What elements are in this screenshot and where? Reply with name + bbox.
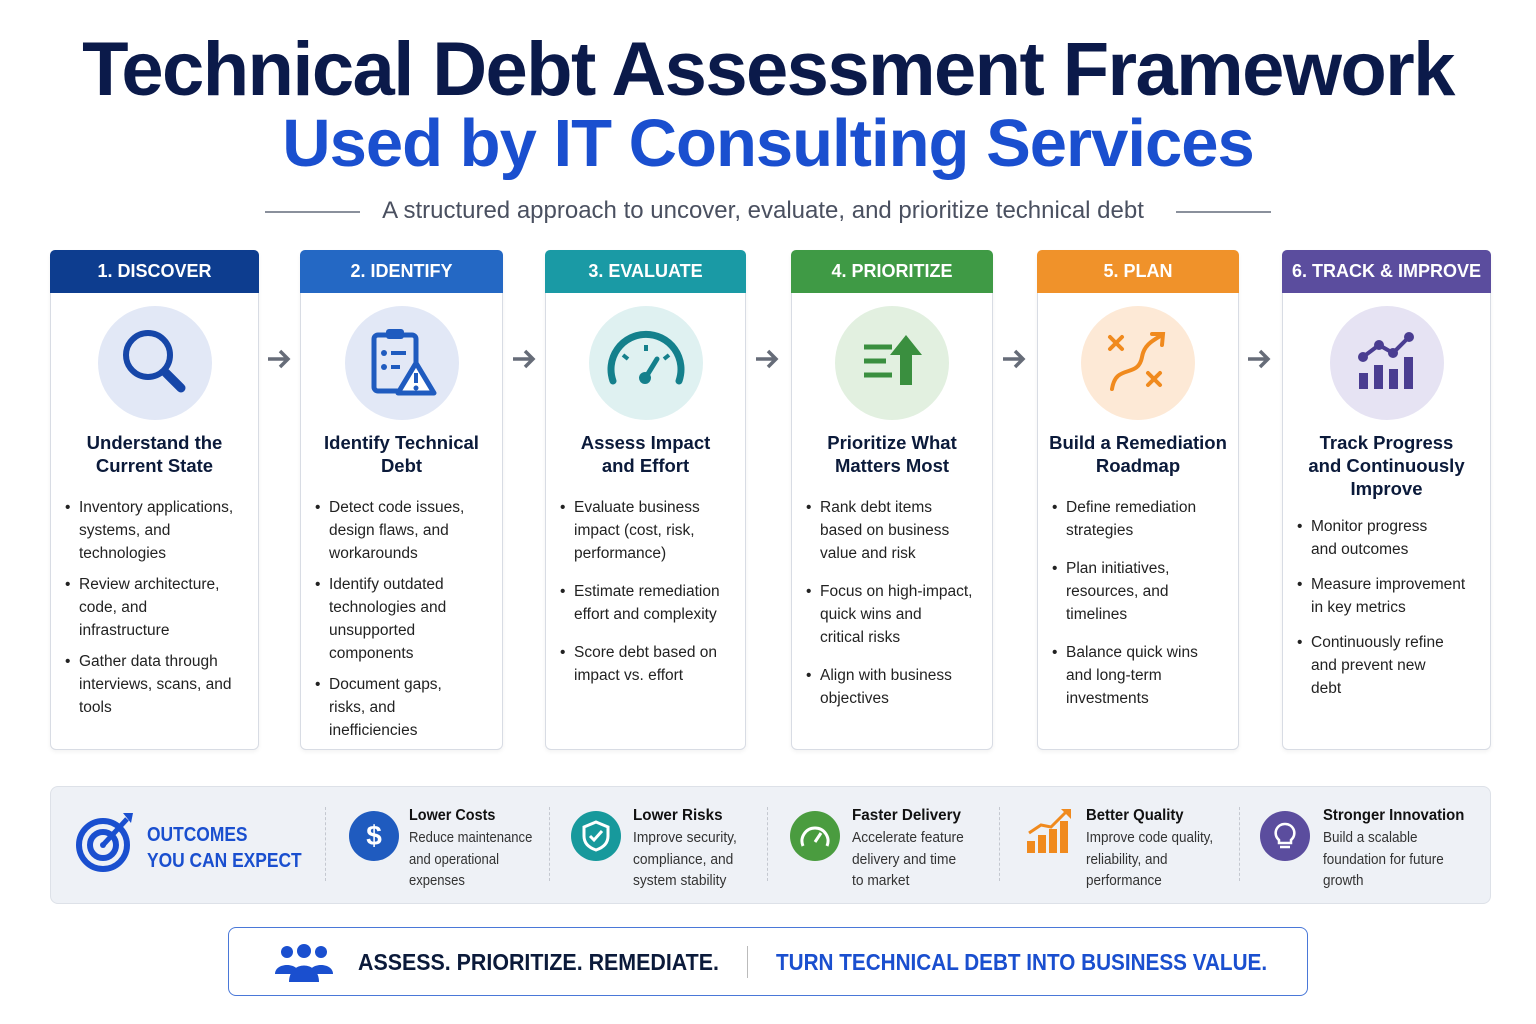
bullets: and outcomes: [1311, 541, 1408, 558]
bullets: and prevent new: [1311, 657, 1426, 674]
outcome: lower costs: and operational: [409, 852, 499, 868]
header: discover: [50, 250, 259, 293]
bullets: Detect code issues, design flaws, and workarounds: [329, 499, 464, 562]
card title: Understand the: [87, 432, 222, 453]
card title: [1049, 432, 1227, 476]
card title: and Effort: [602, 455, 689, 476]
arrow: [1003, 350, 1026, 368]
outcomes heading: [147, 824, 302, 872]
bullets: Continuously refine: [1311, 634, 1444, 651]
icon: gauge: [588, 306, 702, 420]
panel: evaluate: [545, 250, 746, 750]
bullets: Plan initiatives, resources, and timelines: [1066, 560, 1169, 623]
panel: outcomes: [50, 786, 1491, 904]
outcome: lower risks: system stability: [633, 873, 726, 889]
title: Technical Debt Assessment Framework: [82, 27, 1454, 112]
card title: [324, 432, 479, 476]
outcome: lower risks: Lower Risks: [633, 807, 723, 824]
panel: identify: [300, 250, 503, 750]
outcome: better quality: performance: [1086, 873, 1162, 889]
outcome: stronger innovation: Stronger Innovation: [1323, 807, 1464, 824]
card title: [827, 432, 957, 476]
bullets: value and risk: [820, 545, 916, 562]
icon: priority list: [835, 306, 949, 420]
bullets: Gather data through interviews, scans, and tools: [79, 653, 232, 716]
header: plan: [1037, 250, 1239, 293]
bullets: critical risks: [820, 629, 900, 646]
bullets: Focus on high‑impact,: [820, 583, 972, 600]
outcome: faster delivery: [790, 807, 964, 889]
arrow: [268, 350, 290, 368]
bullets: [1298, 518, 1466, 697]
bullets: [66, 499, 233, 716]
card title: and Continuously: [1308, 455, 1465, 476]
icon: roadmap: [1081, 306, 1195, 420]
bullets: Rank debt items: [820, 499, 932, 516]
icon: target: [76, 813, 133, 872]
outcome: lower costs: [349, 807, 532, 889]
card title: [1308, 432, 1465, 499]
outcome: lower risks: [571, 807, 737, 889]
card title: [581, 432, 710, 476]
header: evaluate: 3. EVALUATE: [588, 261, 703, 281]
icon: magnifier: [98, 306, 212, 420]
arrow: [1248, 350, 1270, 368]
bullets: based on business: [820, 522, 949, 539]
outcome: faster delivery: to market: [852, 873, 909, 889]
panel: track: [1282, 250, 1491, 750]
outcome: lower costs: Lower Costs: [409, 807, 495, 824]
bullets: Review architecture, code, and infrastructure: [79, 576, 219, 639]
bullets: Score debt based on impact vs. effort: [574, 644, 717, 684]
outcome: lower risks: compliance, and: [633, 852, 733, 868]
bullets: quick wins and: [820, 606, 922, 623]
outcome: lower costs: Reduce maintenance: [409, 830, 532, 846]
bullets: Evaluate business impact (cost, risk, performance): [574, 499, 700, 562]
bullets: Align with business objectives: [820, 667, 952, 707]
outcome: better quality: Improve code quality,: [1086, 830, 1213, 846]
header: discover: 1. DISCOVER: [97, 261, 212, 281]
outcome: better quality: reliability, and: [1086, 852, 1167, 868]
card title: [87, 432, 222, 476]
bullets: in key metrics: [1311, 599, 1406, 616]
outcomes heading: OUTCOMES: [147, 824, 248, 846]
outcomes heading: YOU CAN EXPECT: [147, 850, 302, 872]
outcome: stronger innovation: Build a scalable: [1323, 830, 1417, 846]
outcome: stronger innovation: foundation for future: [1323, 852, 1444, 868]
card title: Build a Remediation: [1049, 432, 1227, 453]
subtitle heading: Used by IT Consulting Services: [282, 106, 1254, 181]
bottom banner: [228, 927, 1308, 996]
header: prioritize: [791, 250, 993, 293]
bullets: [806, 499, 972, 707]
header: prioritize: 4. PRIORITIZE: [831, 261, 953, 281]
card title: Track Progress: [1320, 432, 1453, 453]
icon: chart: [1330, 306, 1444, 420]
outcome: faster delivery: Accelerate feature: [852, 830, 964, 846]
outcome: better quality: [1027, 807, 1213, 889]
icon: clipboard warning: [344, 306, 458, 420]
outcome: better quality: Better Quality: [1086, 807, 1184, 824]
arrow: [756, 350, 778, 368]
header: identify: 2. IDENTIFY: [350, 261, 452, 281]
header: track: 6. TRACK & IMPROVE: [1292, 261, 1481, 281]
outcome: faster delivery: delivery and time: [852, 852, 956, 868]
outcome: stronger innovation: [1260, 807, 1464, 889]
bullets: [1052, 499, 1198, 707]
outcome: lower costs: expenses: [409, 873, 465, 889]
card title: Current State: [96, 455, 213, 476]
card title: Roadmap: [1096, 455, 1180, 476]
bullets: Inventory applications, systems, and technologies: [79, 499, 233, 562]
card title: Debt: [381, 455, 422, 476]
bullets: Estimate remediation effort and complexity: [574, 583, 720, 623]
icon: people: [275, 944, 333, 982]
header: plan: 5. PLAN: [1103, 261, 1172, 281]
bullets: Document gaps, risks, and inefficiencies: [329, 676, 442, 739]
bullets: Identify outdated technologies and unsupported components: [329, 576, 446, 662]
bullets: Balance quick wins and long-term investments: [1066, 644, 1198, 707]
card title: Matters Most: [835, 455, 949, 476]
panel: discover: [50, 250, 259, 750]
slogan: ASSESS. PRIORITIZE. REMEDIATE.: [358, 949, 719, 975]
header: track: [1282, 250, 1491, 293]
bullets: Measure improvement: [1311, 576, 1465, 593]
card title: Improve: [1351, 478, 1422, 499]
card title: Prioritize What: [827, 432, 957, 453]
panel: plan: [1037, 250, 1239, 750]
outcome: lower risks: Improve security,: [633, 830, 737, 846]
bullets: Define remediation strategies: [1066, 499, 1196, 539]
header: evaluate: [545, 250, 746, 293]
card title: Assess Impact: [581, 432, 710, 453]
bullets: Monitor progress: [1311, 518, 1427, 535]
slogan value: TURN TECHNICAL DEBT INTO BUSINESS VALUE.: [776, 949, 1267, 975]
outcome: stronger innovation: growth: [1323, 873, 1363, 889]
panel: prioritize: [791, 250, 993, 750]
outcome: faster delivery: Faster Delivery: [852, 807, 961, 824]
bullets: [316, 499, 464, 739]
arrow: [513, 350, 536, 368]
tagline: A structured approach to uncover, evaluate, and prioritize technical debt: [382, 197, 1144, 224]
card title: Identify Technical: [324, 432, 479, 453]
header: identify: [300, 250, 503, 293]
bullets: debt: [1311, 680, 1341, 697]
bullets: [560, 499, 720, 684]
outcome: lower costs: $: [366, 820, 382, 851]
